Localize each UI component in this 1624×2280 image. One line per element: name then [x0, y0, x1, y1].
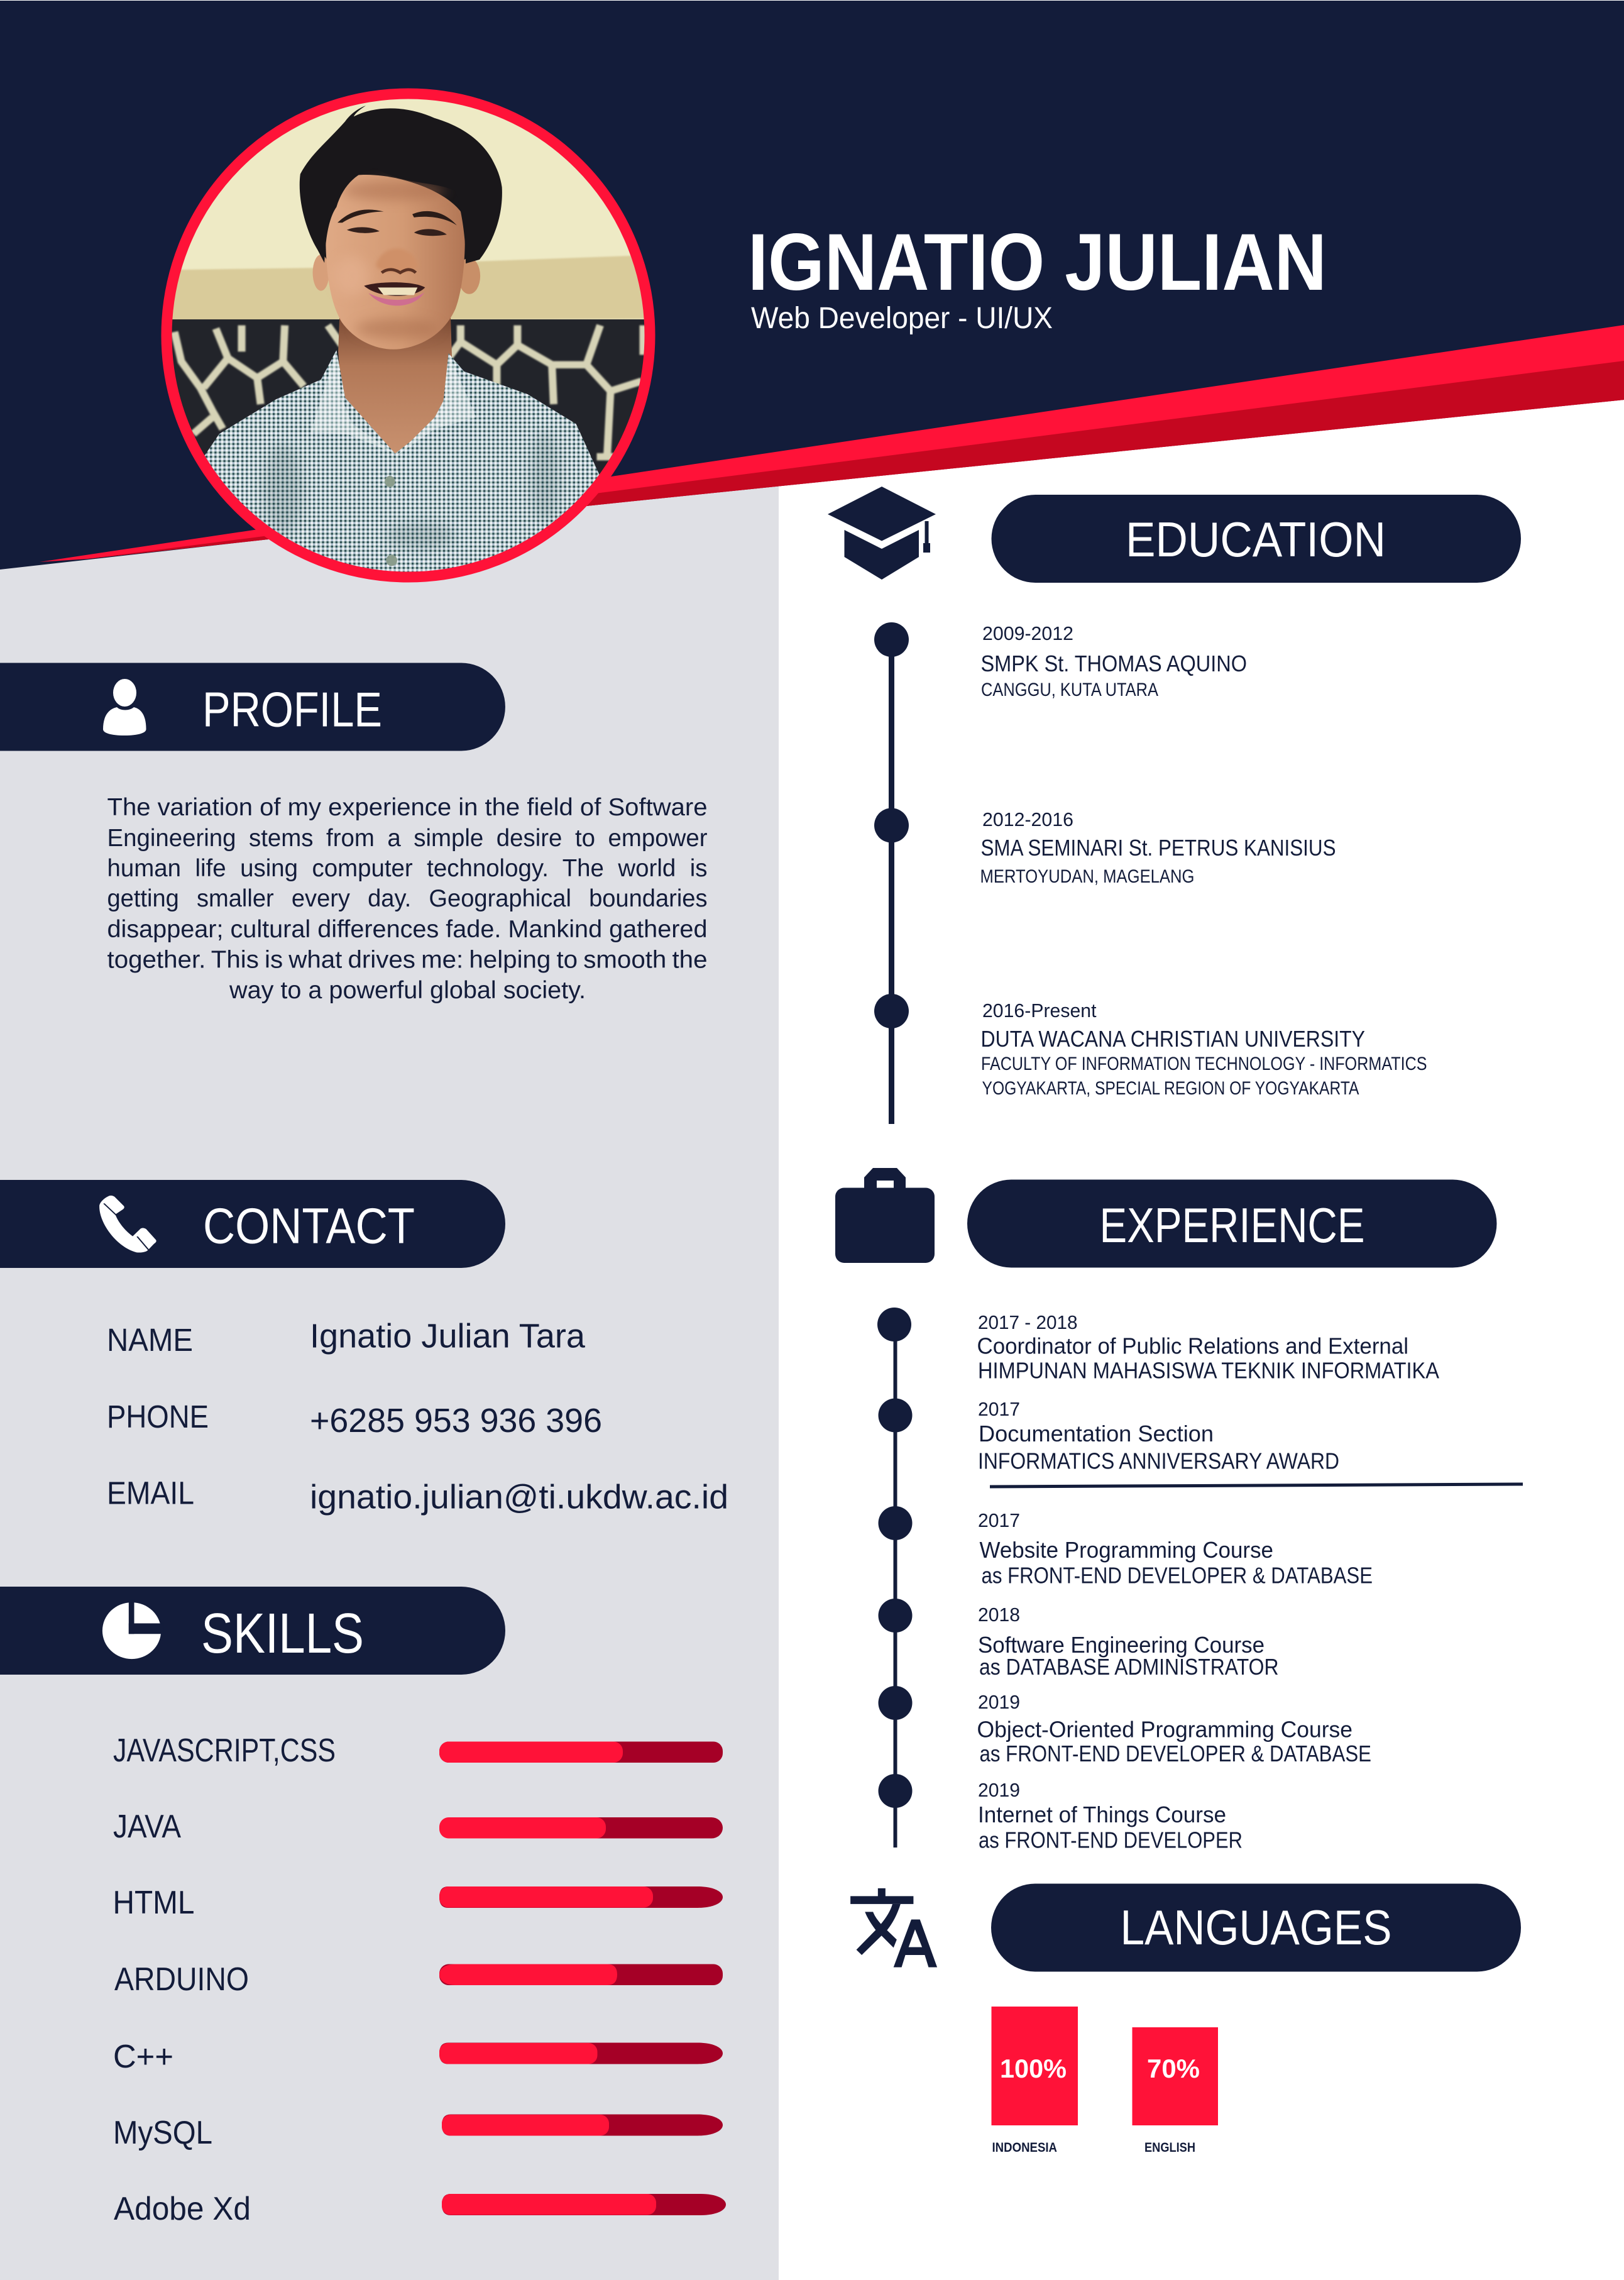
education entry: university: 2016-Present [982, 1000, 1097, 1022]
bar: indonesia [992, 2007, 1078, 2155]
name title: IGNATIO JULIAN [748, 218, 1327, 307]
panel: experience [835, 1168, 1523, 1853]
profile paragraph: The variation of my experience in the field of Software [107, 794, 708, 821]
education entry: SMPK [980, 622, 1247, 700]
education entry: SMA: SMA SEMINARI St. PETRUS KANISIUS [980, 835, 1336, 861]
education entry: university: YOGYAKARTA, SPECIAL REGION OF YOGYAKARTA [982, 1078, 1359, 1099]
experience entry: public relations: Coordinator of Public Relations and External [977, 1333, 1408, 1359]
skill: mysql [113, 2115, 723, 2151]
contact rows: NAME [107, 1322, 193, 1358]
red diagonal stripe [40, 325, 1624, 562]
experience entry: iot course: Internet of Things Course [978, 1802, 1226, 1827]
experience entry: public relations: 2017 - 2018 [978, 1311, 1077, 1333]
icon: graduation cap [828, 487, 936, 580]
contact rows: Ignatio Julian Tara [310, 1318, 586, 1355]
skill: html: HTML [113, 1885, 195, 1921]
contact rows: +6285 953 936 396 [310, 1402, 602, 1440]
education entry: SMPK: SMPK St. THOMAS AQUINO [980, 651, 1247, 676]
skill: java: JAVA [113, 1809, 181, 1845]
left grey panel [0, 440, 779, 2280]
experience entry: iot course [978, 1779, 1243, 1853]
header banner [0, 1, 1624, 570]
profile paragraph: getting smaller every day. Geographical boundaries [107, 885, 708, 912]
education entry: SMPK: 2009-2012 [982, 622, 1073, 644]
dark red diagonal stripe [88, 361, 1624, 559]
experience entry: documentation: Documentation Section [979, 1421, 1214, 1446]
heading: profile: PROFILE [202, 681, 382, 737]
heading: languages [991, 1883, 1521, 1971]
experience entry: public relations: HIMPUNAN MAHASISWA TEKNIK INFORMATIKA [978, 1358, 1439, 1383]
experience entry: documentation [978, 1398, 1339, 1473]
contact rows: EMAIL [107, 1475, 194, 1511]
education entry: university [980, 1000, 1427, 1099]
contact rows: ignatio.julian@ti.ukdw.ac.id [310, 1479, 728, 1516]
experience entry: website course: 2017 [978, 1509, 1020, 1531]
icon: briefcase [835, 1168, 935, 1263]
experience entry: website course [978, 1509, 1373, 1588]
experience entry: public relations [977, 1311, 1439, 1383]
contact rows [107, 1318, 728, 1516]
photo ring [167, 94, 650, 577]
profile paragraph: Engineering stems from a simple desire to empower [107, 825, 708, 852]
experience entry: software engineering: Software Engineering Course [978, 1632, 1265, 1658]
panel: languages [850, 1883, 1521, 2155]
heading: experience [967, 1179, 1497, 1267]
education entry: SMA: 2012-2016 [982, 808, 1073, 830]
bar: indonesia: 100% [1000, 2054, 1067, 2083]
experience entry: software engineering: as DATABASE ADMINISTRATOR [979, 1654, 1278, 1680]
heading: skills [0, 1587, 505, 1675]
experience entry: software engineering: 2018 [978, 1604, 1020, 1626]
education entry: SMPK: CANGGU, KUTA UTARA [981, 680, 1158, 700]
profile paragraph [107, 794, 708, 1004]
skill: mysql: MySQL [113, 2115, 212, 2151]
contact rows: PHONE [107, 1399, 209, 1435]
education entry: university: FACULTY OF INFORMATION TECHNOLOGY - INFORMATICS [981, 1054, 1427, 1074]
experience timeline [877, 1308, 913, 1848]
portrait photo [159, 85, 662, 588]
bar: english: ENGLISH [1144, 2140, 1195, 2155]
panel: profile [0, 663, 708, 1004]
heading: skills: SKILLS [201, 1602, 364, 1665]
education entry: SMA: MERTOYUDAN, MAGELANG [980, 866, 1194, 887]
skill: c++: C++ [113, 2039, 173, 2075]
experience entry: website course: as FRONT-END DEVELOPER & DATABASE [982, 1563, 1373, 1588]
experience entry: oop course: Object-Oriented Programming Course [977, 1716, 1352, 1743]
skill: arduino [114, 1961, 723, 1998]
experience entry: software engineering [978, 1604, 1278, 1680]
heading: contact: CONTACT [203, 1198, 415, 1253]
experience entry: oop course: as FRONT-END DEVELOPER & DATABASE [979, 1741, 1371, 1766]
experience entry: oop course [977, 1691, 1371, 1766]
skill: arduino: ARDUINO [114, 1961, 249, 1998]
skill: c++ [113, 2039, 723, 2075]
education timeline [874, 622, 909, 1124]
skill: javascript css: JAVASCRIPT,CSS [113, 1732, 336, 1769]
experience entry: iot course: as FRONT-END DEVELOPER [979, 1827, 1243, 1853]
bar: english: 70% [1147, 2054, 1200, 2083]
icon: phone [99, 1196, 156, 1253]
heading: profile [0, 663, 505, 751]
heading: languages: LANGUAGES [1120, 1900, 1391, 1955]
icon: pie chart [102, 1599, 163, 1659]
skill: adobe xd: Adobe Xd [114, 2191, 251, 2227]
profile paragraph: way to a powerful global society. [229, 977, 586, 1004]
experience entry: iot course: 2019 [978, 1779, 1020, 1801]
icon: translate [850, 1888, 937, 1967]
education entry: university: DUTA WACANA CHRISTIAN UNIVERSITY [980, 1026, 1365, 1052]
profile paragraph: together. This is what drives me: helping to smooth the [107, 947, 708, 973]
skill: adobe xd [114, 2191, 726, 2227]
heading: education [992, 495, 1521, 583]
profile paragraph: human life using computer technology. The world is [107, 855, 708, 882]
bar: indonesia: INDONESIA [992, 2140, 1057, 2155]
profile paragraph: disappear; cultural differences fade. Mankind gathered [107, 916, 708, 943]
skill: java [113, 1809, 723, 1845]
heading: contact [0, 1180, 505, 1268]
icon: person [103, 679, 146, 735]
panel: skills [0, 1587, 726, 2227]
skill: javascript css [113, 1732, 723, 1769]
heading: experience: EXPERIENCE [1100, 1198, 1365, 1253]
bar: english [1133, 2027, 1218, 2155]
divider line [990, 1482, 1523, 1489]
experience entry: documentation: 2017 [978, 1398, 1020, 1420]
education entry: SMA [980, 808, 1336, 887]
experience entry: website course: Website Programming Course [979, 1537, 1273, 1563]
experience entry: oop course: 2019 [978, 1691, 1020, 1713]
heading: education: EDUCATION [1126, 512, 1386, 567]
experience entry: documentation: INFORMATICS ANNIVERSARY AWARD [978, 1448, 1339, 1473]
skill: html [113, 1885, 723, 1921]
panel: education [828, 487, 1521, 1124]
job subtitle: Web Developer - UI/UX [751, 302, 1053, 335]
panel: contact [0, 1180, 728, 1516]
